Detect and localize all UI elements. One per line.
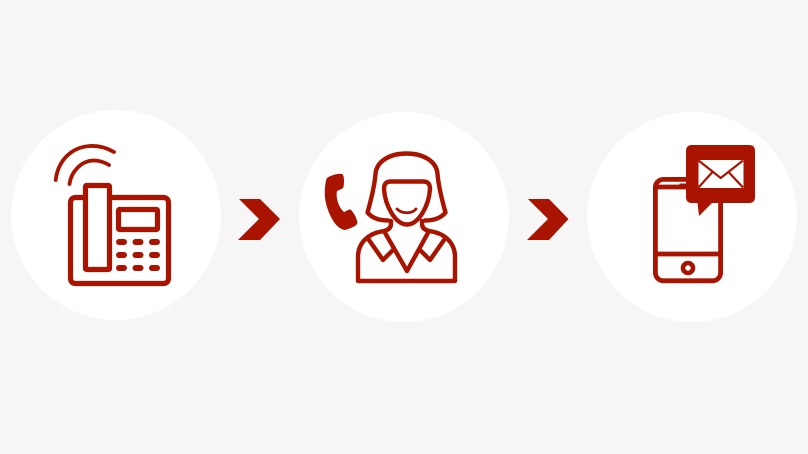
icon: face (384, 182, 430, 224)
arrow: first chevron (238, 199, 280, 240)
icon: smartphone (655, 179, 721, 281)
icon: hair (368, 154, 446, 220)
icon: handset solid (325, 174, 358, 230)
icon: smile (397, 209, 416, 213)
icon: keypad (116, 239, 160, 271)
panel: call agent (299, 112, 509, 322)
arrow: second chevron (527, 199, 568, 240)
icon: phone body (70, 198, 168, 284)
icon: signal arcs (56, 146, 114, 184)
icon: desk phone with signal (56, 146, 169, 284)
icon: display (118, 210, 158, 230)
icon: message bubble (686, 145, 755, 216)
icon: agent woman (358, 154, 455, 281)
icon: shoulders and collar (358, 221, 455, 281)
icon: handset (86, 186, 110, 270)
icon: envelope (698, 160, 744, 188)
icon: speaker slot (680, 184, 688, 188)
panel: smartphone message (587, 112, 797, 322)
icon: home button (683, 263, 693, 273)
panel: desk phone (11, 110, 221, 320)
